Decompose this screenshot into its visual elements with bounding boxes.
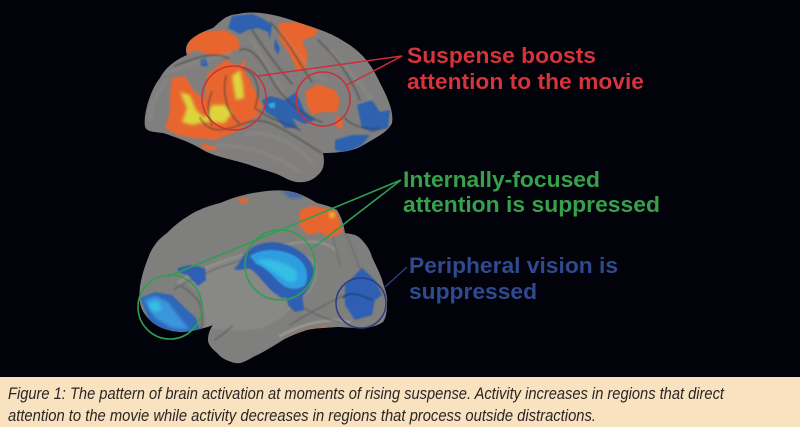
label: internally-focused attention: Internally-focused (403, 167, 600, 192)
label: suspense boosts attention: attention to the movie (407, 69, 644, 94)
caption panel (0, 377, 800, 427)
blue activation: medial prefrontal (140, 292, 200, 332)
label: internally-focused attention: attention is suppressed (403, 192, 660, 217)
green callout: circles and leader lines (138, 180, 401, 339)
label: peripheral vision: Peripheral vision is (409, 253, 618, 278)
bottom brain medial view (139, 190, 387, 363)
blue activation (200, 14, 390, 153)
sulci (174, 234, 360, 341)
central flat region (182, 258, 317, 330)
blue activation: precuneus (234, 242, 314, 300)
orange activation (237, 198, 343, 340)
label: suspense boosts attention: Suspense boosts (407, 43, 596, 68)
label: peripheral vision: suppressed (409, 279, 537, 304)
label: internally-focused attention (403, 167, 660, 217)
caption text: attention to the movie while activity decreases in regions that process outside distractions. (8, 406, 596, 425)
label: peripheral vision (409, 253, 618, 304)
yellow activation (180, 70, 244, 125)
top brain lateral view (145, 13, 392, 182)
blue activation: occipital (345, 268, 382, 320)
red callout: circles and leader lines (202, 56, 402, 130)
label: suspense boosts attention (407, 43, 644, 94)
gyri highlights and sulci (174, 21, 382, 154)
orange activation (165, 22, 343, 150)
blue callout: circle and leader line (336, 267, 407, 328)
caption text (8, 384, 725, 425)
